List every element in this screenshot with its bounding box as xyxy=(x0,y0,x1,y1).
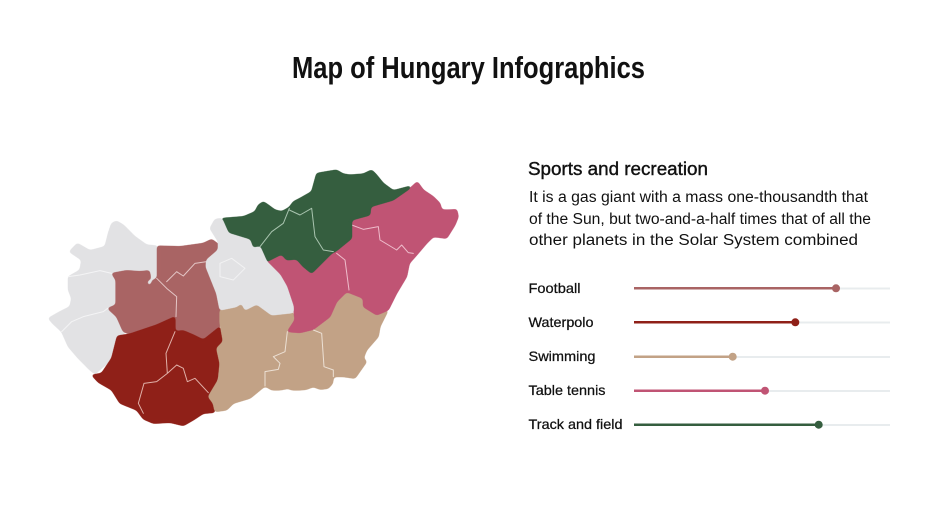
map of Hungary xyxy=(48,170,458,426)
row: swimming: Swimming xyxy=(528,349,596,364)
description text: It is a gas giant with a mass one-thousandth that xyxy=(529,189,869,206)
panel: sports and recreation xyxy=(528,158,871,249)
row: waterpolo xyxy=(528,315,890,330)
row: waterpolo: Waterpolo xyxy=(528,315,594,330)
heading: Sports and recreation xyxy=(528,158,708,179)
row: table tennis: Table tennis xyxy=(528,383,606,398)
row: football: Football xyxy=(528,281,580,296)
row: track and field: Track and field xyxy=(528,417,622,432)
region: west grey xyxy=(48,221,157,374)
description text: other planets in the Solar System combined xyxy=(529,232,858,249)
description text xyxy=(529,189,871,249)
description text: of the Sun, but two-and-a-half times that of all the xyxy=(529,211,871,228)
row: track and field xyxy=(528,417,890,432)
title: Map of Hungary Infographics xyxy=(292,50,645,85)
region: football rose xyxy=(108,239,222,340)
region: central grey xyxy=(206,218,293,315)
region: track and field green xyxy=(222,170,411,273)
region: swimming tan xyxy=(208,292,388,412)
row: table tennis xyxy=(528,383,890,398)
row: swimming xyxy=(528,349,890,364)
chart: sports sliders xyxy=(528,281,890,432)
row: football xyxy=(528,281,890,296)
region: table tennis pink xyxy=(267,182,458,333)
region: waterpolo dark red xyxy=(92,317,224,426)
